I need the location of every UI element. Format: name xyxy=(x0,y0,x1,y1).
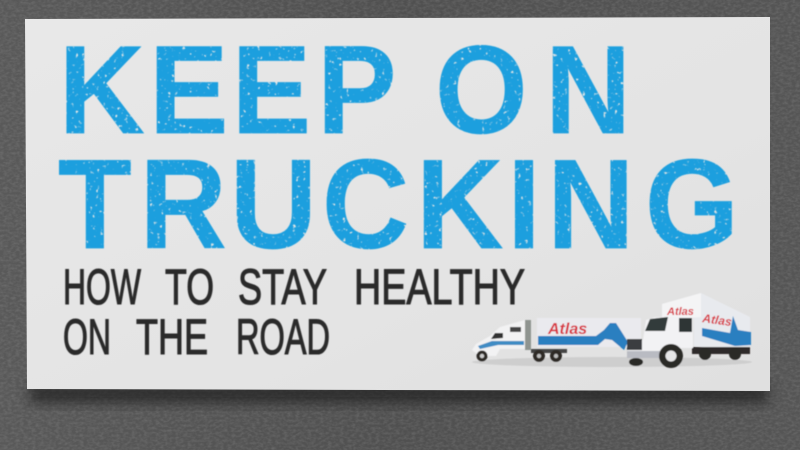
title line 1: E xyxy=(232,20,311,160)
paper panel xyxy=(25,17,770,391)
title line 2: N xyxy=(547,134,634,276)
title line 2: I xyxy=(507,134,541,276)
subtitle: how to stay healthy on the road xyxy=(63,259,525,365)
subtitle: how to stay healthy on the road: HOW xyxy=(63,259,142,315)
subtitle: how to stay healthy on the road: TO xyxy=(165,259,214,315)
subtitle: how to stay healthy on the road: ON xyxy=(63,309,111,365)
title line 2: C xyxy=(322,134,409,276)
box truck body xyxy=(662,293,751,360)
title: keep on trucking xyxy=(58,20,739,276)
subtitle: how to stay healthy on the road: ROAD xyxy=(236,309,330,365)
title line 1: K xyxy=(59,20,145,160)
title line 2: T xyxy=(58,134,132,276)
title line 1: N xyxy=(545,20,631,160)
subtitle: how to stay healthy on the road: THE xyxy=(136,309,208,365)
box truck cab xyxy=(627,317,693,368)
title line 1: E xyxy=(149,20,228,160)
title line 1: P xyxy=(317,20,397,160)
atlas logo on box side: Atlas xyxy=(701,311,733,329)
semi trailer xyxy=(537,318,641,350)
subtitle: how to stay healthy on the road: HEALTHY xyxy=(354,259,525,315)
ground shadow xyxy=(472,357,752,367)
paper shadow xyxy=(30,383,768,403)
atlas logo on trailer: Atlas xyxy=(547,321,587,338)
subtitle: how to stay healthy on the road: STAY xyxy=(238,259,327,315)
semi cab xyxy=(472,320,567,362)
title line 2: U xyxy=(230,134,317,276)
title line 2: K xyxy=(416,134,503,276)
title line 2: G xyxy=(645,134,739,276)
icon: atlas trucks xyxy=(472,293,752,368)
title line 2: R xyxy=(140,134,227,276)
title line 1: O xyxy=(435,20,527,160)
atlas logo on roof: Atlas xyxy=(666,306,694,318)
